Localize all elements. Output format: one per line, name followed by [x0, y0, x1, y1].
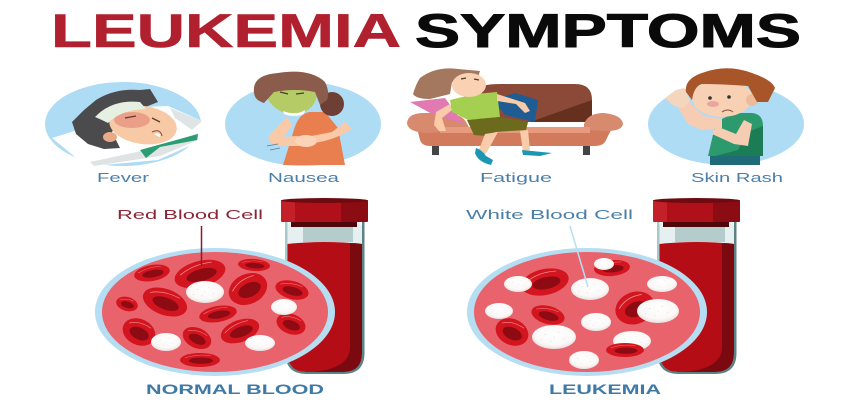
title [51, 4, 801, 57]
callout: Red Blood Cell: Red Blood Cell [117, 207, 263, 222]
callout: White Blood Cell: White Blood Cell [466, 207, 633, 222]
title: SYMPTOMS [415, 4, 801, 57]
icon: blood tube [281, 198, 368, 374]
callout: White Blood Cell [466, 207, 633, 287]
label: Nausea: Nausea [268, 170, 340, 185]
panel: leukemia [466, 198, 740, 397]
icon: fever patient [45, 82, 202, 166]
chart: normal blood magnified circle [95, 248, 335, 376]
label: Fatigue: Fatigue [480, 170, 552, 185]
panel: fever [45, 82, 202, 185]
chart: leukemia magnified circle [467, 248, 707, 376]
panel: fatigue [407, 68, 623, 185]
icon: nausea woman [225, 72, 381, 166]
icon: boy with rash [648, 68, 804, 165]
label: Leukemia: LEUKEMIA [549, 381, 661, 397]
panel: normal blood [95, 198, 368, 397]
icon: blood tube [653, 198, 740, 374]
panel: skin rash [648, 68, 804, 185]
label: Fever: Fever [97, 170, 150, 185]
label: Skin Rash: Skin Rash [691, 170, 783, 185]
label: Normal Blood: NORMAL BLOOD [146, 381, 324, 397]
title: LEUKEMIA [51, 4, 401, 57]
icon: woman on sofa [407, 68, 623, 165]
panel: nausea [225, 72, 381, 185]
